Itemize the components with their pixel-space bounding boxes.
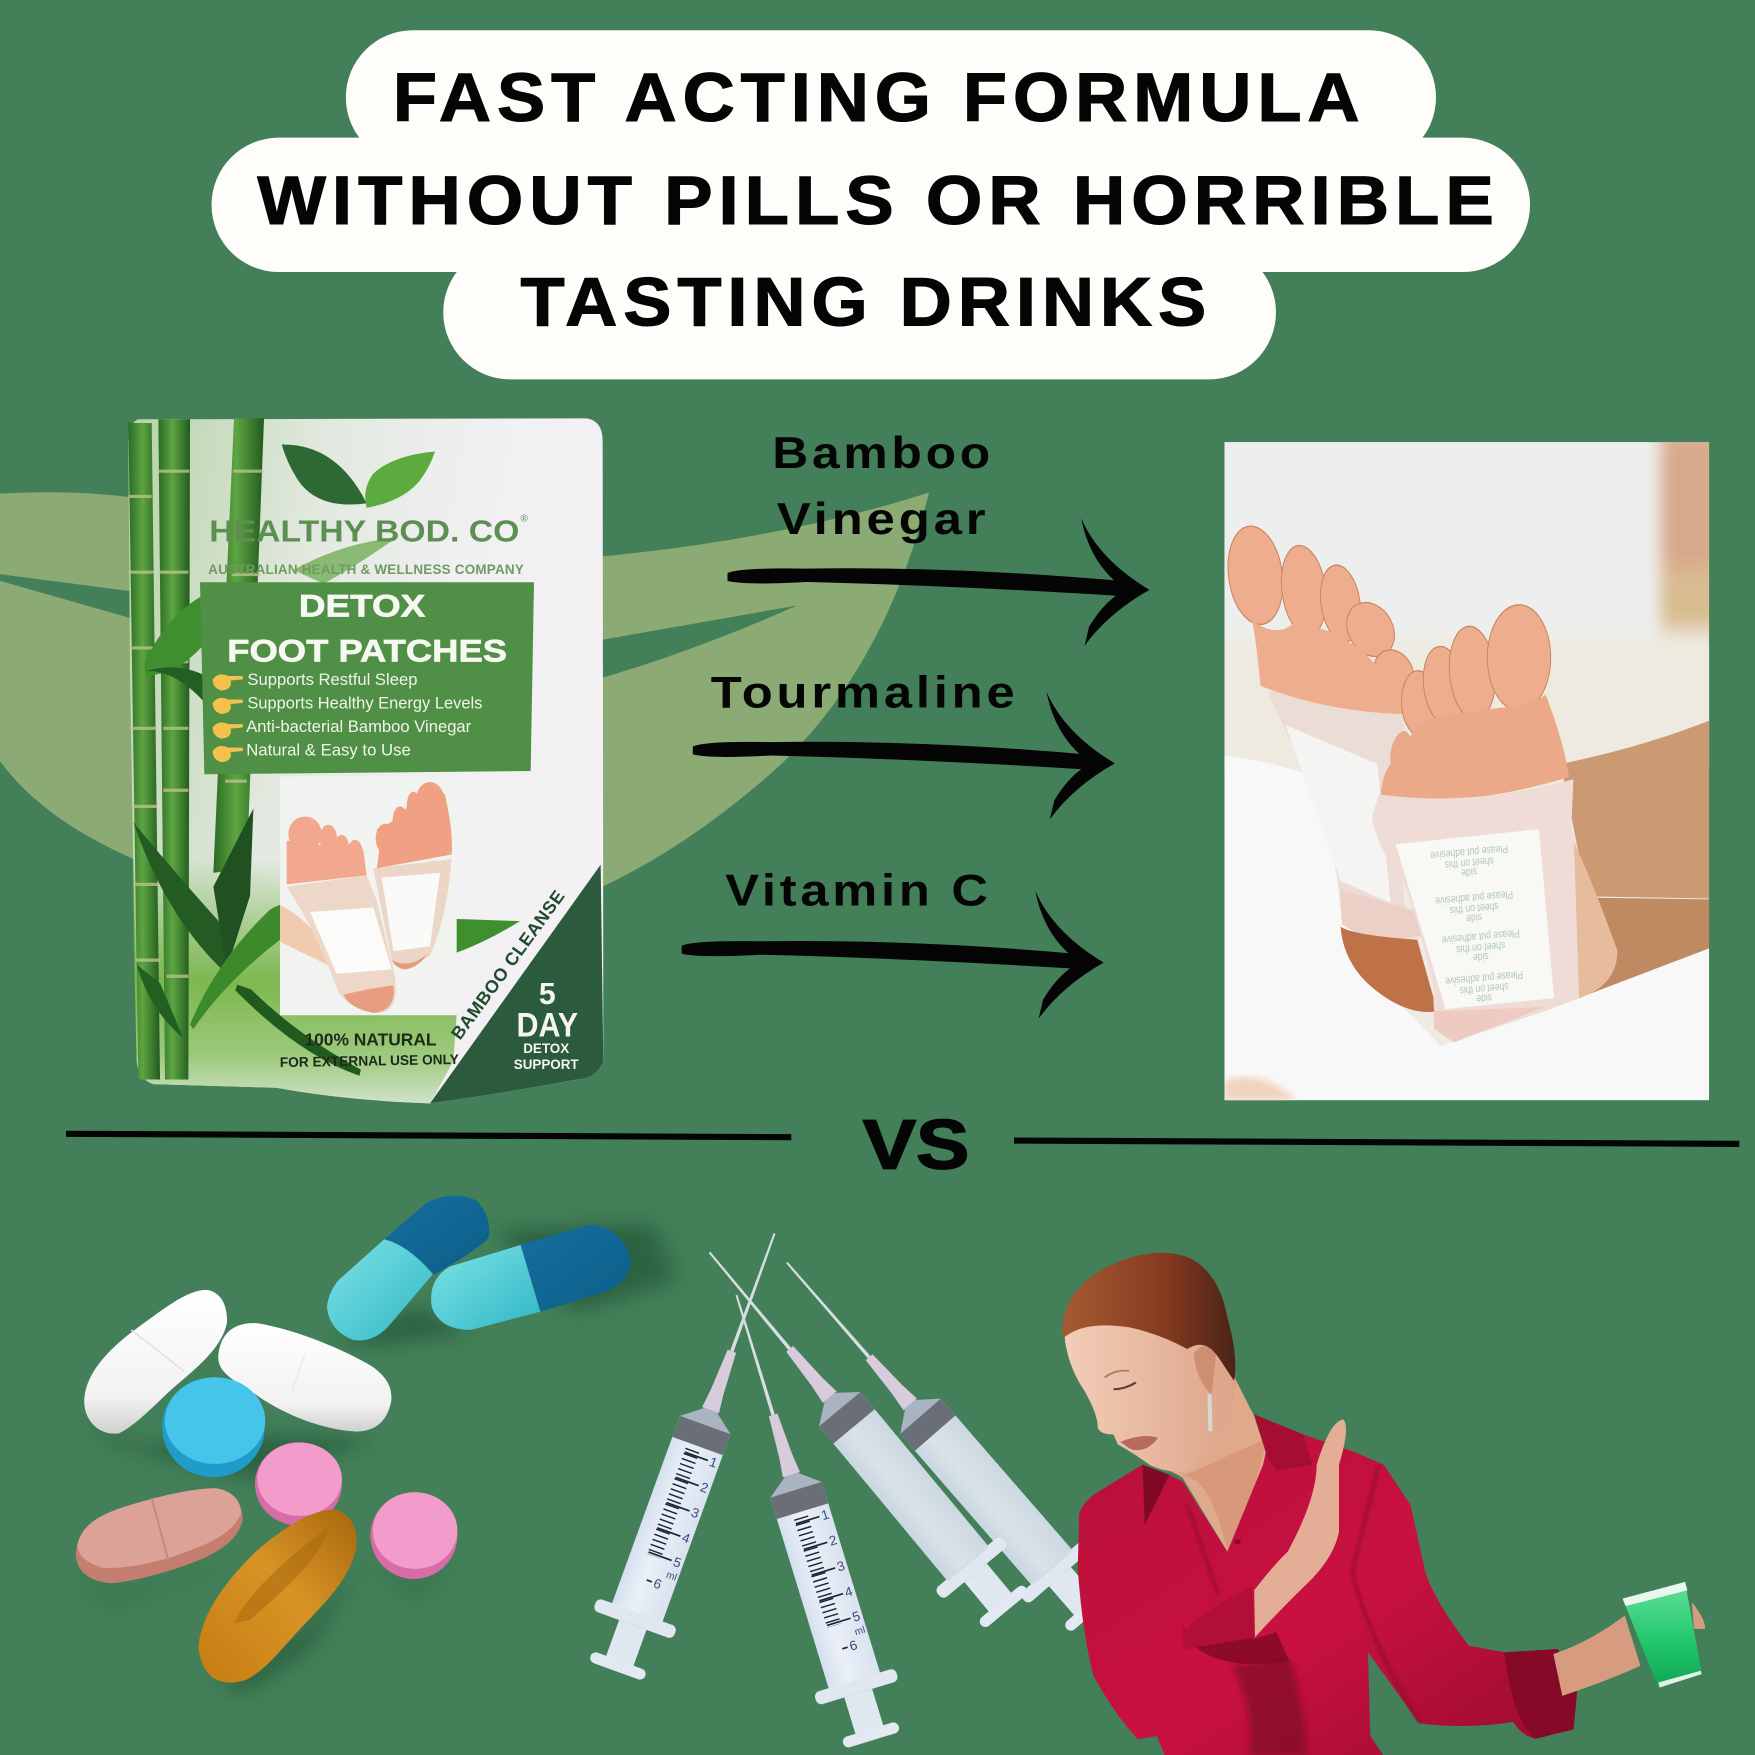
mirrored patch print: Please put adhesive — [1430, 842, 1508, 861]
capsule 1 — [327, 1196, 489, 1340]
white caplet 1 — [84, 1290, 227, 1434]
mirrored patch print: Please put adhesive — [1445, 968, 1523, 987]
bamboo stems — [128, 423, 160, 1080]
arrow label: Bamboo Vinegar: Vinegar — [777, 494, 989, 544]
hair — [1062, 1253, 1235, 1381]
cuff on raised arm — [1183, 1587, 1254, 1650]
product pouch: ® — [520, 514, 528, 525]
neck and chest — [1147, 1364, 1268, 1552]
syringe left: 6 — [652, 1576, 664, 1592]
product pouch: FOR EXTERNAL USE ONLY — [280, 1051, 460, 1070]
blue tablet — [162, 1377, 265, 1477]
syringe front: 4 — [843, 1583, 855, 1600]
inset foot photo — [280, 777, 457, 1015]
syringe left: 1 — [707, 1454, 720, 1471]
green info panel — [200, 582, 534, 774]
photo: feet with detox patches — [1224, 442, 1710, 1100]
syringe front — [696, 1283, 913, 1753]
pills group — [76, 1196, 677, 1693]
syringe left — [576, 1219, 815, 1686]
pouch badge: 5 day: DETOX — [523, 1041, 569, 1056]
arrow 1 — [728, 518, 1149, 646]
mirrored patch print: side — [1466, 910, 1482, 924]
mirrored patch print: sheet on this — [1449, 899, 1499, 916]
mirrored patch print: Please put adhesive — [1441, 926, 1520, 946]
bedding — [1224, 755, 1709, 1100]
syringe left: 3 — [689, 1505, 701, 1521]
pouch bottom text: 100% NATURAL — [304, 1029, 437, 1049]
arrow 3 — [682, 891, 1104, 1019]
syringe back right — [755, 1235, 1124, 1642]
shirt folds and cuffs — [1143, 1465, 1169, 1525]
pink tablet 2 — [370, 1492, 457, 1579]
arrow 2 — [693, 692, 1115, 819]
pouch badge: 5 day: SUPPORT — [514, 1057, 579, 1072]
legs — [1561, 721, 1709, 899]
capsule 2 — [431, 1225, 631, 1330]
VS heading: VS — [863, 1106, 969, 1184]
mirrored patch print: side — [1461, 865, 1477, 879]
syringe front: 5 — [850, 1608, 862, 1625]
tan tablet — [76, 1488, 243, 1583]
logo leaves — [282, 445, 367, 505]
right foot patch — [1372, 779, 1585, 1042]
mirrored patch print: side — [1476, 991, 1492, 1005]
syringe left: 4 — [680, 1530, 693, 1547]
head — [1064, 1321, 1236, 1472]
bamboo leaves — [145, 595, 205, 675]
syringe front: 6 — [848, 1637, 859, 1654]
syringe left: 2 — [698, 1479, 710, 1496]
right foot — [1381, 605, 1569, 801]
amber softgel — [198, 1510, 357, 1683]
product pouch — [128, 418, 603, 1103]
arrow label: Tourmaline: Tourmaline — [711, 667, 1019, 717]
product pouch: FOOT PATCHES — [227, 633, 507, 668]
title banner: TASTING DRINKS — [520, 265, 1212, 341]
syringe front: ml — [853, 1625, 867, 1638]
shadows — [76, 1223, 677, 1693]
pouch badge: 5 day: DAY — [517, 1006, 578, 1044]
syringe left: 5 — [671, 1554, 683, 1571]
pouch panel text: DETOX — [299, 589, 425, 624]
VS divider left line — [66, 1134, 791, 1137]
drink hand — [1553, 1615, 1640, 1696]
decorative leaf shapes — [0, 492, 929, 891]
facial details — [1113, 1383, 1136, 1389]
pouch badge: 5 day: 5 — [539, 978, 556, 1011]
syringe front: 1 — [819, 1507, 831, 1523]
VS divider right line — [1014, 1141, 1739, 1144]
syringe front: 3 — [835, 1558, 847, 1574]
white caplet 2 — [218, 1323, 391, 1432]
pouch bullet list: Supports Healthy Energy Levels — [247, 694, 482, 712]
syringes — [576, 1219, 1124, 1753]
raised hand — [1254, 1419, 1346, 1637]
title banner — [212, 30, 1530, 379]
pouch brand text: HEALTHY BOD. CO — [209, 516, 519, 549]
product pouch: AUSTRALIAN HEALTH & WELLNESS COMPANY — [208, 562, 524, 577]
pouch bullet list: Anti-bacterial Bamboo Vinegar — [246, 718, 472, 736]
corner band — [430, 865, 603, 1103]
arrow label: Bamboo Vinegar: Bamboo — [772, 428, 994, 478]
mirrored patch print: sheet on this — [1459, 980, 1509, 996]
mirrored patch print: Please put adhesive — [1435, 887, 1513, 907]
left foot — [1220, 518, 1420, 714]
pink tablet 1 — [255, 1442, 342, 1526]
title banner: WITHOUT PILLS OR HORRIBLE — [257, 163, 1500, 239]
mirrored patch print — [1430, 842, 1523, 1005]
left foot patch — [1267, 690, 1424, 942]
pouch badge: 5 day — [514, 978, 579, 1072]
arrow label: Bamboo Vinegar — [772, 428, 994, 544]
syringe back middle — [677, 1225, 1040, 1638]
syringe front: 2 — [827, 1532, 839, 1549]
shirt — [1078, 1414, 1577, 1755]
title banner: FAST ACTING FORMULA — [393, 60, 1365, 136]
mirrored patch print: sheet on this — [1444, 854, 1494, 871]
mirrored patch print: sheet on this — [1456, 938, 1506, 955]
syringe left: ml — [665, 1570, 678, 1584]
pouch bullet list: Natural & Easy to Use — [246, 742, 411, 760]
product pouch: BAMBOO CLEANSE — [447, 887, 569, 1043]
pouch bullet list: Supports Restful Sleep — [247, 671, 417, 689]
mirrored patch print: side — [1472, 950, 1489, 963]
arrow label: Vitamin C: Vitamin C — [725, 865, 992, 915]
green drink glass — [1623, 1582, 1702, 1687]
woman refusing drink — [1062, 1253, 1705, 1755]
pouch bullet list — [213, 671, 482, 762]
